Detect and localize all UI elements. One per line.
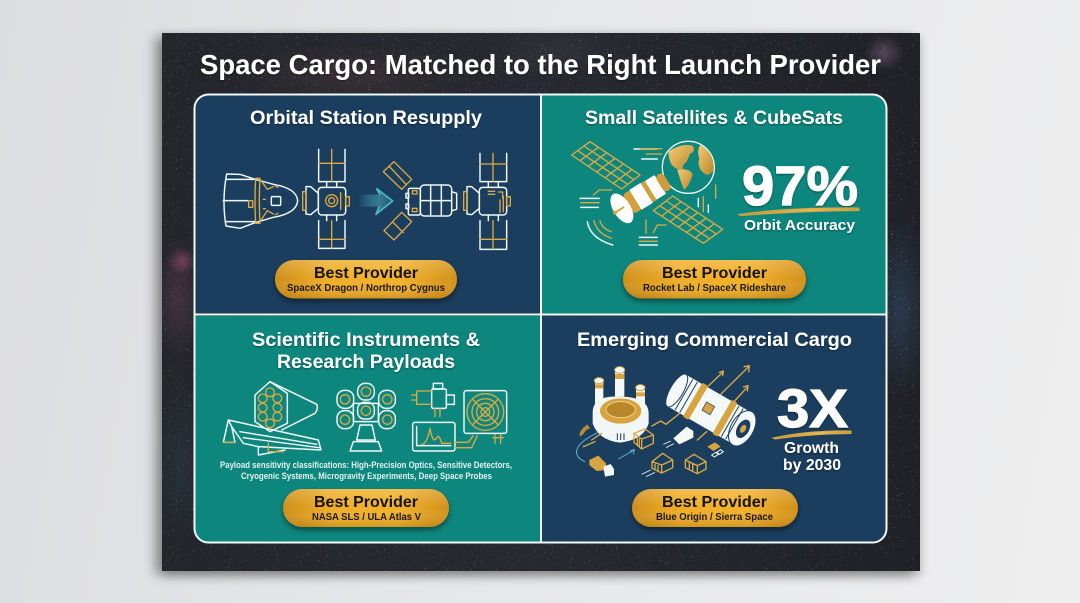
text: payload sensitivity classifications bbox=[220, 460, 512, 482]
badge: best provider bbox=[283, 489, 449, 527]
illustration: satellite and earth bbox=[572, 141, 723, 245]
icon: containers and trucks bbox=[577, 424, 723, 477]
star noise bbox=[162, 33, 920, 571]
heading: emerging commercial cargo: Emerging Commercial Cargo bbox=[577, 330, 852, 351]
icon: signal lines bbox=[580, 149, 716, 245]
badge: best provider: Best Provider bbox=[662, 265, 767, 282]
panel: orbital station resupply bbox=[194, 94, 540, 314]
icon: satellite body and dish bbox=[605, 166, 676, 228]
icon: optical sensor bbox=[412, 383, 454, 417]
badge: best provider: Best Provider bbox=[314, 494, 418, 511]
panel frame: white outline and dividers bbox=[194, 94, 887, 543]
stat: 97 percent orbit accuracy: 97% bbox=[742, 154, 858, 217]
stat: 3X growth by 2030: 3X bbox=[777, 379, 848, 439]
arrow: teal transfer arrow bbox=[358, 188, 393, 214]
icon: detector mount bbox=[337, 383, 395, 451]
illustration: capsule, station, arrow and cargo craft bbox=[223, 149, 510, 249]
badge: best provider bbox=[632, 489, 798, 527]
icon: space station left bbox=[303, 149, 349, 248]
icon: cygnus cargo craft bbox=[383, 162, 457, 240]
badge: best provider: Best Provider bbox=[662, 494, 767, 511]
icon: earth globe bbox=[662, 141, 714, 193]
badge: best provider: Best Provider bbox=[314, 265, 418, 282]
icon: space station right bbox=[464, 153, 510, 249]
panel: scientific instruments and research payloads bbox=[194, 316, 540, 543]
badge: best provider bbox=[275, 260, 457, 298]
icon: space telescope bbox=[223, 382, 321, 455]
arrows: growth arrows bbox=[652, 366, 749, 440]
badge: best provider: Rocket Lab / SpaceX Rideshare bbox=[643, 282, 786, 294]
heading: scientific instruments and research payloads: Research Payloads bbox=[277, 352, 455, 373]
stat: 3X growth by 2030: Growth bbox=[784, 440, 839, 457]
badge: best provider bbox=[623, 260, 806, 298]
icon: cargo module bbox=[661, 370, 762, 451]
stat: 97 percent orbit accuracy: Orbit Accuracy bbox=[744, 217, 856, 234]
icon: launch hub bbox=[593, 367, 649, 443]
badge: best provider: SpaceX Dragon / Northrop Cygnus bbox=[287, 282, 445, 294]
icon: dragon capsule bbox=[223, 174, 298, 228]
stat: 3X growth by 2030: by 2030 bbox=[783, 457, 841, 474]
panel: emerging commercial cargo bbox=[542, 316, 887, 543]
illustration: commercial hub, module and cargo bbox=[577, 366, 762, 477]
badge: best provider: Blue Origin / Sierra Space bbox=[656, 511, 773, 523]
heading: small satellites and cubesats: Small Satellites & CubeSats bbox=[585, 108, 843, 129]
title: Space Cargo: Matched to the Right Launch Provider bbox=[200, 49, 881, 80]
icon: solar panel lower bbox=[653, 196, 723, 243]
illustration: telescope, detector mount, instruments bbox=[223, 382, 507, 455]
panel: small satellites and cubesats bbox=[542, 94, 887, 314]
poster: starfield background bbox=[162, 33, 920, 571]
icon: cooling fan unit bbox=[464, 391, 507, 443]
arrow head outline bbox=[376, 188, 393, 214]
icon: solar panel upper bbox=[572, 142, 640, 189]
badge: best provider: NASA SLS / ULA Atlas V bbox=[312, 511, 421, 523]
stat: 3X growth by 2030 bbox=[773, 379, 851, 474]
icon: spectrum monitor bbox=[413, 422, 477, 451]
heading: scientific instruments and research payloads bbox=[252, 330, 480, 373]
text: payload sensitivity classifications: Payload sensitivity classifications: High-Precision Optics, Sensitive Detectors, bbox=[220, 460, 512, 471]
text: payload sensitivity classifications: Cryogenic Systems, Microgravity Experiments, Deep Space Probes bbox=[241, 471, 492, 482]
heading: scientific instruments and research payloads: Scientific Instruments & bbox=[252, 330, 480, 351]
heading: orbital station resupply: Orbital Station Resupply bbox=[250, 108, 482, 129]
